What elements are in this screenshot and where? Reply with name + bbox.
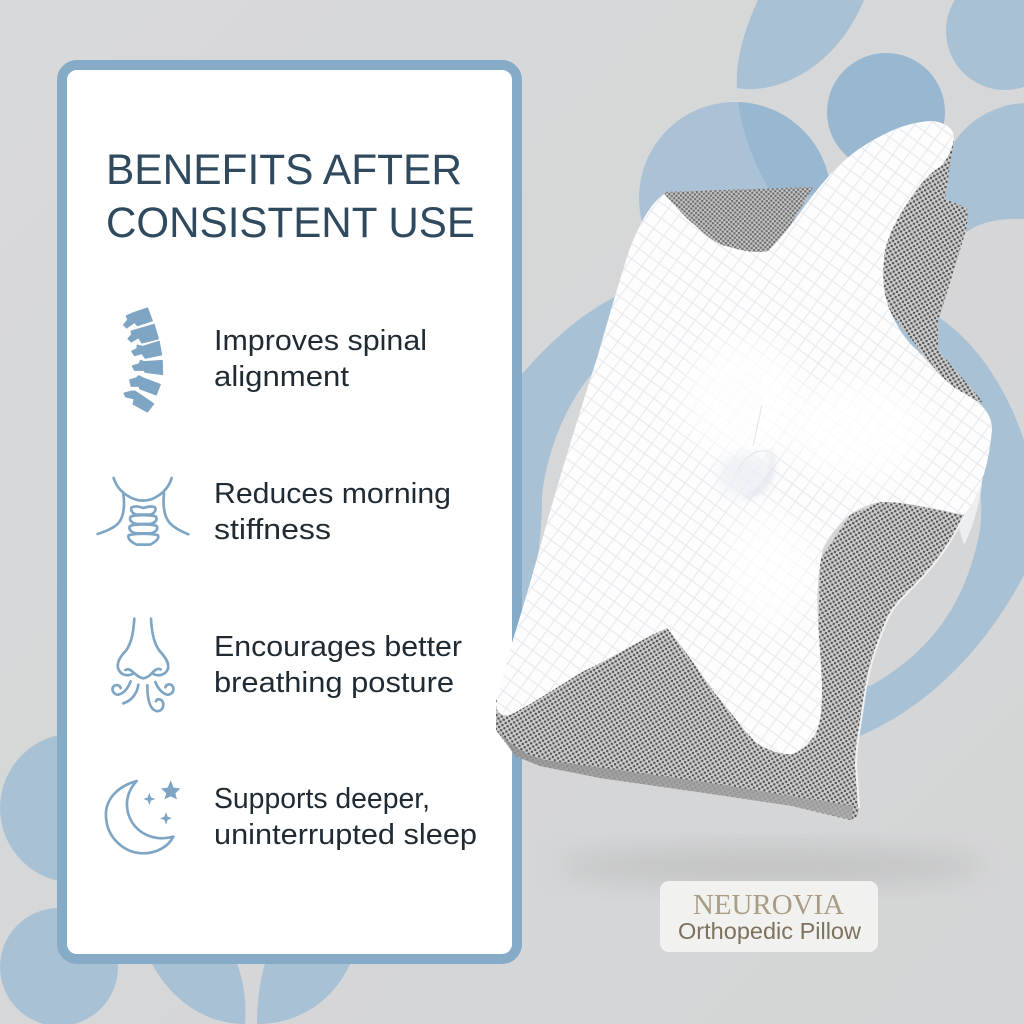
heading: BENEFITS AFTER [106,146,462,194]
brand name: NEUROVIA [693,890,845,921]
text: encourages better breathing posture: Encourages better [214,631,462,663]
text: improves spinal alignment [214,325,427,393]
text: encourages better breathing posture: breathing posture [214,667,454,699]
text: reduces morning stiffness: stiffness [214,514,331,546]
floor shadow [555,848,985,884]
text: reduces morning stiffness: Reduces morning [214,478,451,510]
pillow: white quilted top [496,121,992,754]
text: encourages better breathing posture [214,631,462,699]
panel: benefits card [62,65,517,959]
text: improves spinal alignment: Improves spinal [214,325,427,357]
brand badge [660,881,878,952]
icon: nose [113,619,173,711]
icon: moon and stars [106,780,180,853]
text: supports deeper uninterrupted sleep: uninterrupted sleep [214,819,477,851]
pillow: right mesh wing [880,140,983,402]
heading [106,146,475,247]
heading: CONSISTENT USE [106,199,475,247]
icon: spine [124,308,162,412]
pillow product illustration [496,121,992,820]
pillow: bottom mesh side [496,500,964,820]
pillow: pale seam strip on right edge [958,470,983,545]
pillow: seam at right edge [856,516,964,808]
pillow: center dimple stitching [738,405,768,470]
pillow: top back mesh [664,187,813,260]
text: supports deeper uninterrupted sleep: Supports deeper, [214,783,430,815]
pillow: bottom edge strip [498,730,853,820]
product name: Orthopedic Pillow [678,918,861,944]
text: improves spinal alignment: alignment [214,361,349,393]
pillow: soft shading [685,340,930,630]
text: reduces morning stiffness [214,478,451,546]
text: supports deeper uninterrupted sleep [214,783,477,851]
icon: neck [98,478,188,545]
